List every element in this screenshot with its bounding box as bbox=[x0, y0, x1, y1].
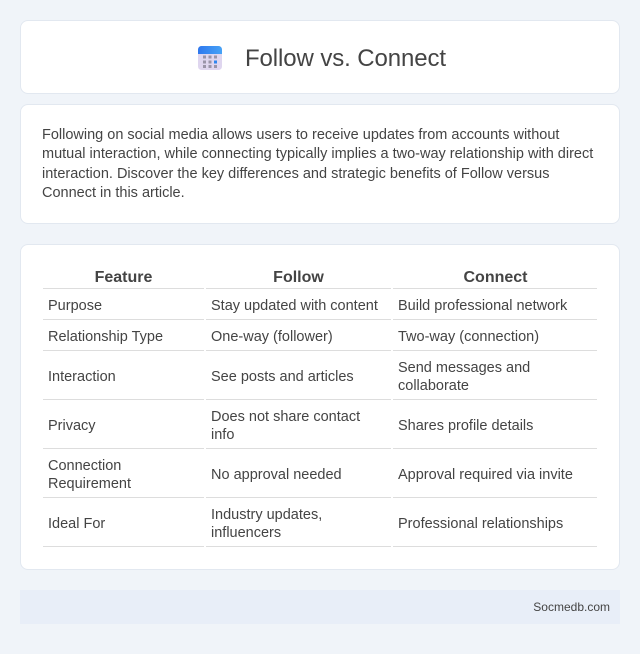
table header: Feature bbox=[95, 269, 152, 286]
row: connection requirement bbox=[48, 458, 573, 492]
row: relationship type: One-way (follower) bbox=[211, 329, 333, 345]
row: interaction: See posts and articles bbox=[211, 369, 354, 385]
row: purpose: Build professional network bbox=[398, 298, 567, 314]
row: connection requirement: No approval needed bbox=[211, 467, 342, 483]
row: privacy: info bbox=[211, 427, 234, 443]
row: connection requirement: Connection bbox=[48, 458, 121, 474]
intro text: mutual interaction, while connecting typically implies a two-way relationship with direct bbox=[42, 146, 593, 162]
table header bbox=[95, 269, 528, 286]
row: ideal for: Professional relationships bbox=[398, 516, 563, 532]
intro text: interaction. Discover the key differences and strategic benefits of Follow versus bbox=[42, 166, 549, 182]
row: interaction: Interaction bbox=[48, 369, 116, 385]
row: interaction: collaborate bbox=[398, 378, 469, 394]
title: Follow vs. Connect bbox=[245, 45, 446, 72]
row: interaction bbox=[48, 360, 530, 394]
header card bbox=[20, 20, 620, 94]
table header: Follow bbox=[273, 269, 324, 286]
footer text: Socmedb.com bbox=[533, 600, 610, 614]
table card bbox=[20, 244, 620, 570]
icon: calendar bbox=[198, 46, 222, 70]
row: relationship type bbox=[48, 329, 539, 345]
row: connection requirement: Requirement bbox=[48, 476, 131, 492]
row: privacy bbox=[48, 409, 533, 443]
row: privacy: Does not share contact bbox=[211, 409, 360, 425]
row: privacy: Privacy bbox=[48, 418, 96, 434]
intro text: Connect in this article. bbox=[42, 185, 185, 201]
intro card bbox=[20, 104, 620, 224]
intro text bbox=[42, 127, 594, 201]
row: purpose: Purpose bbox=[48, 298, 102, 314]
row: interaction: Send messages and bbox=[398, 360, 530, 376]
row: relationship type: Two-way (connection) bbox=[398, 329, 539, 345]
row: ideal for: Ideal For bbox=[48, 516, 105, 532]
row: connection requirement: Approval required via invite bbox=[398, 467, 573, 483]
footer bar bbox=[20, 590, 620, 624]
table header: Connect bbox=[464, 269, 528, 286]
row: ideal for bbox=[48, 507, 563, 541]
intro text: Following on social media allows users to receive updates from accounts without bbox=[42, 127, 559, 143]
row: ideal for: influencers bbox=[211, 525, 281, 541]
row: privacy: Shares profile details bbox=[398, 418, 533, 434]
row: purpose bbox=[48, 298, 568, 314]
comparison table bbox=[43, 269, 597, 547]
row: relationship type: Relationship Type bbox=[48, 329, 163, 345]
row: purpose: Stay updated with content bbox=[211, 298, 378, 314]
row: ideal for: Industry updates, bbox=[211, 507, 322, 523]
